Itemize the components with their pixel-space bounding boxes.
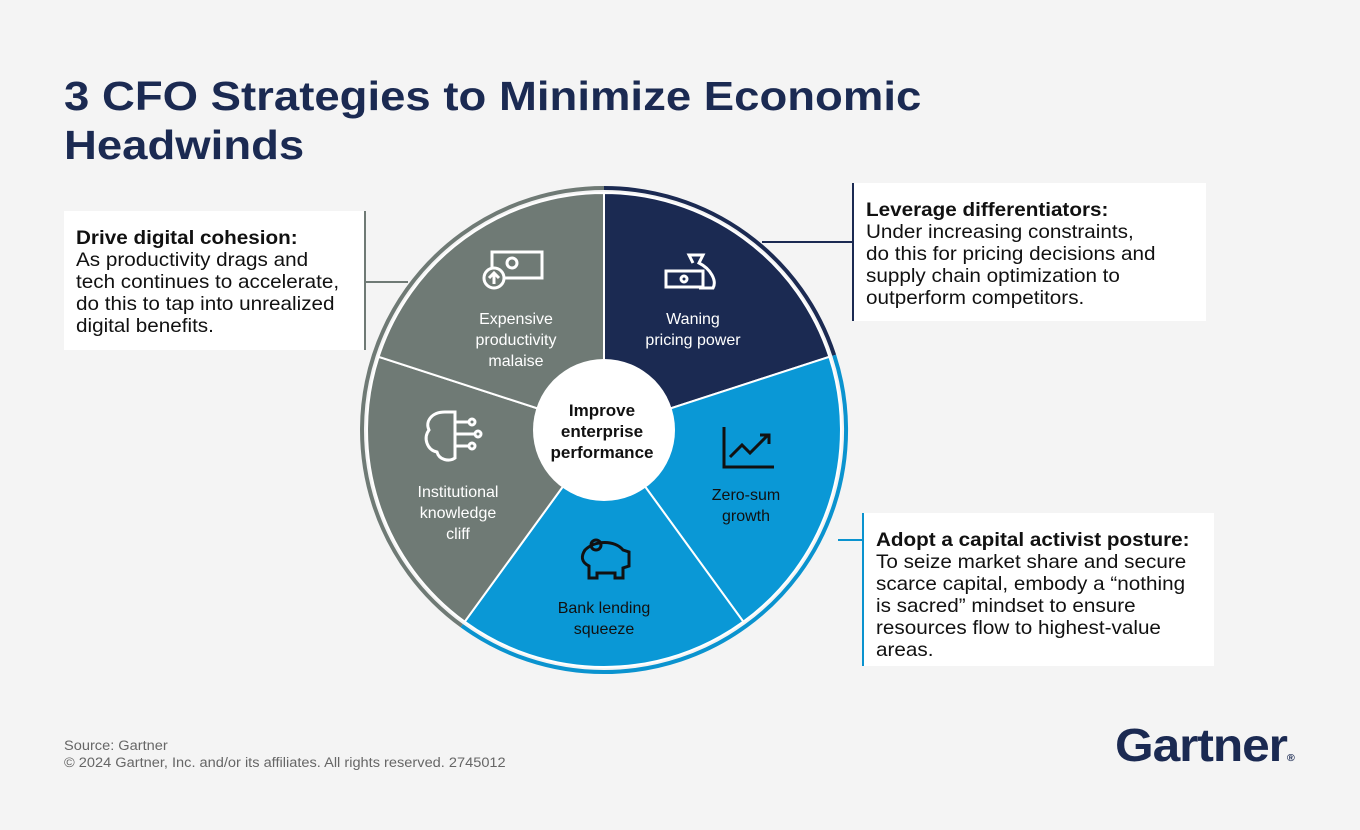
panel: drive digital cohesion: tech continues to accelerate, xyxy=(76,271,339,293)
panel: capital activist posture: areas. xyxy=(876,639,933,661)
center label: enterprise xyxy=(561,422,643,441)
icon: brain network xyxy=(426,412,481,460)
label: institutional knowledge cliff: Institutional xyxy=(418,484,498,501)
panel: leverage differentiators: do this for pricing decisions and xyxy=(866,243,1156,265)
label: institutional knowledge cliff: cliff xyxy=(446,526,470,543)
label: expensive productivity malaise: productivity xyxy=(476,332,556,349)
title xyxy=(64,73,921,168)
label: waning pricing power: Waning xyxy=(666,311,720,328)
panel: capital activist posture: resources flow to highest-value xyxy=(876,617,1161,639)
panel: drive digital cohesion: Drive digital cohesion: xyxy=(76,227,298,249)
icon: money up xyxy=(484,252,542,288)
panel: capital activist posture: To seize market share and secure xyxy=(876,551,1186,573)
panel: drive digital cohesion xyxy=(64,211,364,350)
logo: Gartner® xyxy=(1115,719,1295,771)
label: expensive productivity malaise: Expensive xyxy=(479,311,553,328)
label: zero-sum growth: growth xyxy=(722,508,770,525)
label: bank lending squeeze: squeeze xyxy=(574,621,634,638)
panel: leverage differentiators: Leverage differentiators: xyxy=(866,199,1108,221)
center label: performance xyxy=(551,443,653,462)
panel: drive digital cohesion: do this to tap into unrealized xyxy=(76,293,335,315)
title: 3 CFO Strategies to Minimize Economic xyxy=(64,73,921,119)
panel: leverage differentiators xyxy=(854,183,1206,321)
center label: Improve xyxy=(569,401,635,420)
source footer xyxy=(64,738,506,770)
panel: drive digital cohesion: digital benefits. xyxy=(76,315,214,337)
panel: capital activist posture: Adopt a capital activist posture: xyxy=(876,529,1190,551)
label: waning pricing power: pricing power xyxy=(645,332,741,349)
icon: growth chart xyxy=(724,427,774,467)
panel: drive digital cohesion: As productivity drags and xyxy=(76,249,308,271)
panel: capital activist posture xyxy=(864,513,1214,666)
panel: capital activist posture: is sacred” mindset to ensure xyxy=(876,595,1136,617)
label: zero-sum growth: Zero-sum xyxy=(712,487,780,504)
label: bank lending squeeze: Bank lending xyxy=(558,600,650,617)
label: expensive productivity malaise: malaise xyxy=(488,353,544,370)
title: Headwinds xyxy=(64,122,304,168)
panel: leverage differentiators: supply chain optimization to xyxy=(866,265,1120,287)
panel: leverage differentiators: Under increasing constraints, xyxy=(866,221,1134,243)
source footer: © 2024 Gartner, Inc. and/or its affiliates. All rights reserved. 2745012 xyxy=(64,755,506,770)
panel: leverage differentiators: outperform competitors. xyxy=(866,287,1084,309)
icon: money bag xyxy=(666,255,714,288)
source footer: Source: Gartner xyxy=(64,738,168,753)
panel: capital activist posture: scarce capital, embody a “nothing xyxy=(876,573,1185,595)
icon: piggy bank xyxy=(582,540,629,578)
label: institutional knowledge cliff: knowledge xyxy=(420,505,496,522)
